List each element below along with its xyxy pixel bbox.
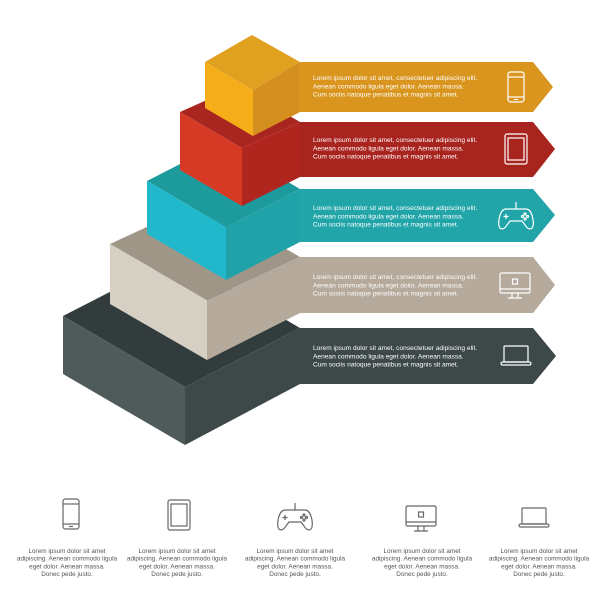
tier: red: Aenean commodo ligula eget dolor. Aenean massa. bbox=[313, 145, 464, 152]
bottom row: item 2 tablet: eget dolor. Aenean massa. bbox=[139, 563, 215, 570]
tier: orange: Lorem ipsum dolor sit amet, consectetuer adipiscing elit. bbox=[313, 75, 477, 82]
tier: teal: Lorem ipsum dolor sit amet, consectetuer adipiscing elit. bbox=[313, 205, 477, 212]
tier: red bbox=[180, 86, 555, 206]
bottom row: item 1 phone: Lorem ipsum dolor sit amet bbox=[28, 548, 106, 555]
bottom row: item 5 laptop: Lorem ipsum dolor sit amet bbox=[500, 548, 578, 555]
bottom row: item 2 tablet: Donec pede justo. bbox=[151, 571, 203, 578]
tier: orange: Cum sociis natoque penatibus et magnis sit amet. bbox=[313, 92, 459, 99]
tier: beige bbox=[110, 201, 555, 360]
tier: red: Cum sociis natoque penatibus et magnis sit amet. bbox=[313, 154, 459, 161]
tier: beige: Aenean commodo ligula eget dolor. Aenean massa. bbox=[313, 282, 464, 289]
bottom row: item 2 tablet: adipiscing. Aenean commodo ligula bbox=[127, 556, 228, 563]
bottom row: item 1 phone: Donec pede justo. bbox=[41, 571, 93, 578]
tier: dark base: Aenean commodo ligula eget dolor. Aenean massa. bbox=[313, 353, 464, 360]
bottom row: item 5 laptop: eget dolor. Aenean massa. bbox=[501, 563, 577, 570]
tier: orange: Aenean commodo ligula eget dolor. Aenean massa. bbox=[313, 83, 464, 90]
bottom row: item 3 gamepad: Donec pede justo. bbox=[269, 571, 321, 578]
tier: teal bbox=[147, 143, 555, 280]
tier: dark base bbox=[63, 257, 556, 445]
bottom row: item 4 monitor: Lorem ipsum dolor sit amet bbox=[383, 548, 461, 555]
bottom row: item 4 monitor: eget dolor. Aenean massa. bbox=[384, 563, 460, 570]
tier: beige: Lorem ipsum dolor sit amet, consectetuer adipiscing elit. bbox=[313, 274, 477, 281]
bottom row: item 1 phone: adipiscing. Aenean commodo ligula bbox=[17, 556, 118, 563]
tier: beige: Cum sociis natoque penatibus et magnis sit amet. bbox=[313, 291, 459, 298]
tier: teal: Cum sociis natoque penatibus et magnis sit amet. bbox=[313, 222, 459, 229]
tier: teal: Aenean commodo ligula eget dolor. Aenean massa. bbox=[313, 213, 464, 220]
tier: red: Lorem ipsum dolor sit amet, consectetuer adipiscing elit. bbox=[313, 137, 477, 144]
bottom row: item 5 laptop: adipiscing. Aenean commodo ligula bbox=[489, 556, 590, 563]
bottom row: item 4 monitor: Donec pede justo. bbox=[396, 571, 448, 578]
bottom row: item 3 gamepad: eget dolor. Aenean massa. bbox=[257, 563, 333, 570]
bottom row: item 4 monitor bbox=[372, 506, 473, 578]
bottom row: item 2 tablet: Lorem ipsum dolor sit amet bbox=[138, 548, 216, 555]
bottom row: item 3 gamepad: Lorem ipsum dolor sit amet bbox=[256, 548, 334, 555]
bottom row: item 1 phone bbox=[17, 499, 118, 578]
bottom row: item 2 tablet bbox=[127, 500, 228, 578]
bottom row: item 1 phone: eget dolor. Aenean massa. bbox=[29, 563, 105, 570]
tier: orange bbox=[205, 35, 553, 136]
bottom row: item 3 gamepad bbox=[245, 503, 346, 578]
bottom row: item 3 gamepad: adipiscing. Aenean commodo ligula bbox=[245, 556, 346, 563]
tier: dark base: Cum sociis natoque penatibus et magnis sit amet. bbox=[313, 362, 459, 369]
bottom row: item 4 monitor: adipiscing. Aenean commodo ligula bbox=[372, 556, 473, 563]
bottom row: item 5 laptop: Donec pede justo. bbox=[513, 571, 565, 578]
bottom row: item 5 laptop bbox=[489, 508, 590, 578]
tier: dark base: Lorem ipsum dolor sit amet, consectetuer adipiscing elit. bbox=[313, 345, 477, 352]
